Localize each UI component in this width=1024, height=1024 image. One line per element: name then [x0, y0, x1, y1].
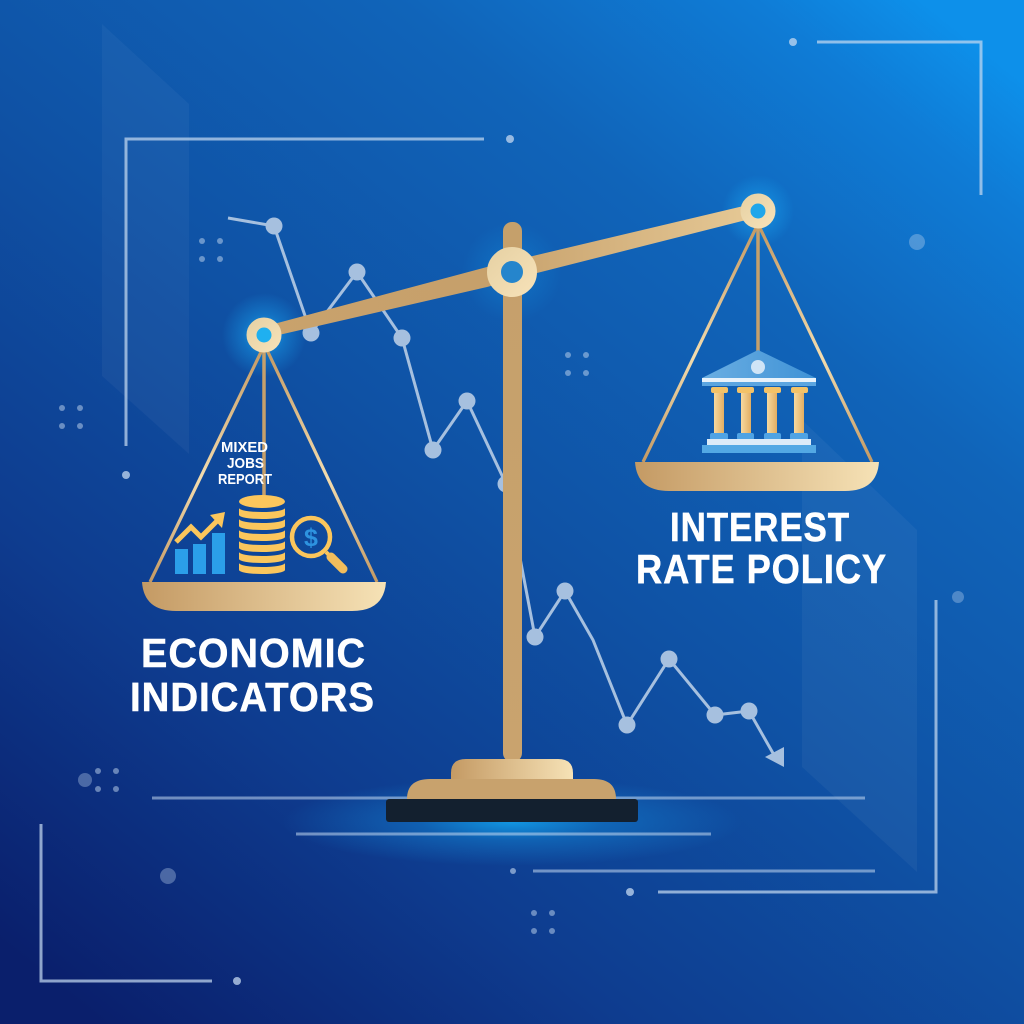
scale base [386, 759, 638, 822]
scale beam [270, 204, 754, 337]
icon: magnifier with dollar [292, 518, 343, 569]
label: mixed jobs report: MIXED [221, 440, 268, 456]
label: mixed jobs report: REPORT [218, 472, 272, 488]
corner bracket: lower left [41, 824, 241, 985]
heading: economic indicators: ECONOMIC [141, 630, 366, 676]
glow under base [282, 778, 742, 866]
label: mixed jobs report: JOBS [227, 456, 264, 472]
declining line chart [228, 218, 784, 767]
icon: central bank [702, 350, 816, 453]
corner bracket: upper right [789, 38, 981, 195]
right beam joint [746, 198, 770, 224]
corner bracket: upper left [122, 135, 514, 479]
floor lines [152, 798, 875, 874]
left pan strings [150, 350, 377, 582]
translucent panel: lower right [802, 420, 917, 872]
decorative floating dots [78, 234, 964, 884]
right pan [635, 462, 879, 491]
decorative dot grids [59, 238, 589, 934]
heading: economic indicators: INDICATORS [130, 674, 375, 720]
right pan strings [643, 228, 872, 462]
translucent panel: upper left [102, 24, 189, 454]
icon: magnifier with dollar: $ [304, 524, 318, 552]
corner bracket: lower right [626, 600, 936, 896]
heading: interest rate policy: RATE POLICY [636, 546, 887, 592]
scale post [503, 222, 522, 762]
heading: economic indicators [130, 630, 375, 720]
icon: rising bar chart [175, 512, 225, 574]
left ring glow [222, 293, 306, 377]
label: mixed jobs report [218, 440, 272, 488]
right ring glow [722, 175, 794, 247]
glow behind pivot [462, 222, 562, 322]
left beam joint [252, 322, 276, 348]
heading: interest rate policy [636, 504, 887, 592]
heading: interest rate policy: INTEREST [670, 504, 850, 550]
central pivot [494, 254, 530, 290]
left pan [142, 582, 386, 611]
icon: coin stack [239, 495, 285, 574]
